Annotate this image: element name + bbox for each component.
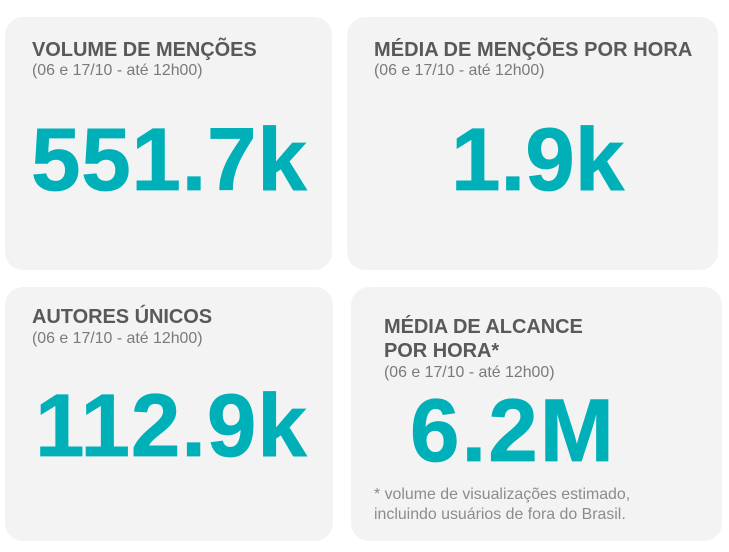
panel: média de menções por hora <box>347 17 718 270</box>
big number: 551.7k <box>31 109 307 209</box>
date range: (06 e 17/10 - até 12h00) <box>32 330 203 347</box>
big number: 6.2M <box>410 380 616 480</box>
heading: POR HORA* <box>384 340 499 362</box>
big number: 1.9k <box>451 109 624 209</box>
big number: 112.9k <box>35 375 308 475</box>
heading: MÉDIA DE ALCANCE <box>384 316 583 338</box>
footnote: incluindo usuários de fora do Brasil. <box>374 506 626 523</box>
heading: AUTORES ÚNICOS <box>32 306 212 328</box>
panel: volume de menções <box>5 17 332 270</box>
panel: média de alcance por hora <box>351 287 722 541</box>
heading: MÉDIA DE MENÇÕES POR HORA <box>374 39 692 61</box>
date range: (06 e 17/10 - até 12h00) <box>384 364 555 381</box>
panel: autores únicos <box>5 287 333 541</box>
date range: (06 e 17/10 - até 12h00) <box>32 62 203 79</box>
heading: VOLUME DE MENÇÕES <box>32 39 257 61</box>
footnote <box>374 486 630 523</box>
date range: (06 e 17/10 - até 12h00) <box>374 62 545 79</box>
heading <box>384 315 583 362</box>
footnote: * volume de visualizações estimado, <box>374 486 630 503</box>
